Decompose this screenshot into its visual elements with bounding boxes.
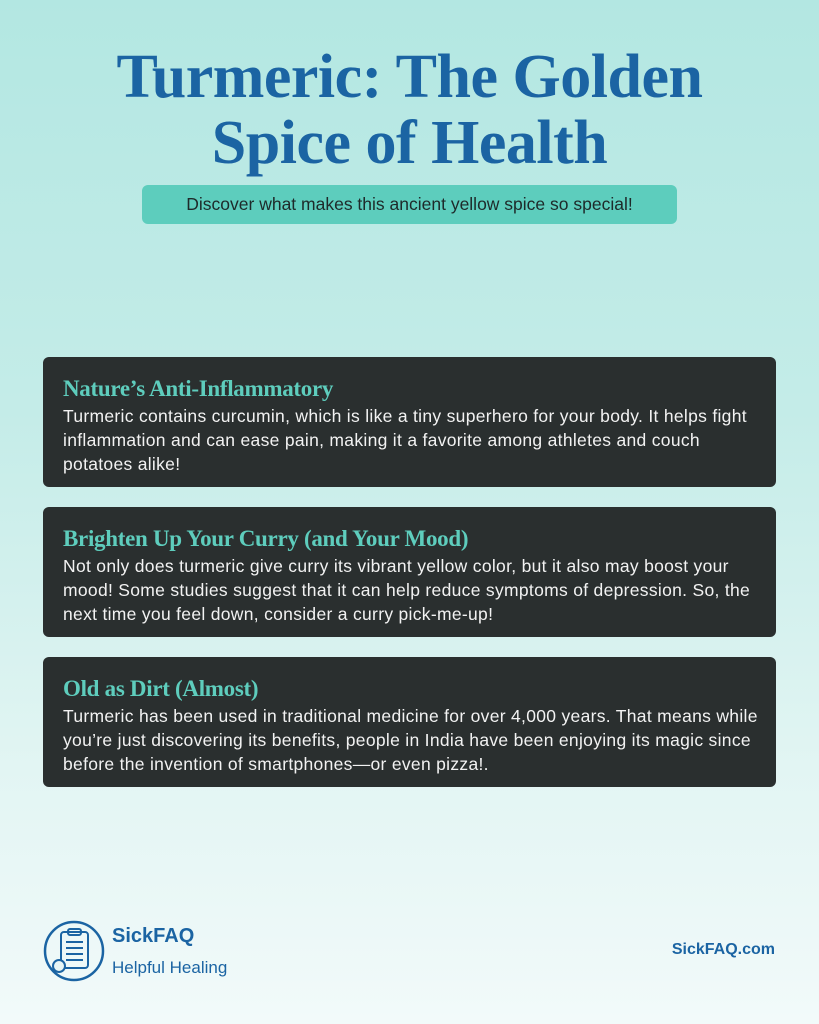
title: Spice of Health xyxy=(212,109,607,177)
text: inflammation and can ease pain, making it a favorite among athletes and couch xyxy=(63,430,700,450)
card: mood xyxy=(43,507,776,637)
website url: SickFAQ.com xyxy=(672,941,775,958)
card: anti-inflammatory xyxy=(43,357,776,487)
heading: Old as Dirt (Almost) xyxy=(63,676,258,701)
text xyxy=(63,556,750,624)
text xyxy=(63,706,758,774)
text: Turmeric contains curcumin, which is like a tiny superhero for your body. It helps fight xyxy=(63,406,747,426)
text: Turmeric has been used in traditional medicine for over 4,000 years. That means while xyxy=(63,706,758,726)
brand name: SickFAQ xyxy=(112,925,194,947)
card: history xyxy=(43,657,776,787)
subtitle pill: Discover what makes this ancient yellow spice so special! xyxy=(186,194,633,214)
text: Not only does turmeric give curry its vibrant yellow color, but it also may boost your xyxy=(63,556,729,576)
heading: Nature’s Anti-Inflammatory xyxy=(63,376,333,401)
text: mood! Some studies suggest that it can help reduce symptoms of depression. So, the xyxy=(63,580,750,600)
title xyxy=(117,43,702,177)
text: before the invention of smartphones—or even pizza!. xyxy=(63,754,489,774)
heading: Brighten Up Your Curry (and Your Mood) xyxy=(63,526,468,551)
title: Turmeric: The Golden xyxy=(117,43,702,111)
subtitle pill xyxy=(142,185,677,224)
text: you’re just discovering its benefits, people in India have been enjoying its magic since xyxy=(63,730,751,750)
text: next time you feel down, consider a curry pick-me-up! xyxy=(63,604,493,624)
text xyxy=(63,406,747,474)
text: potatoes alike! xyxy=(63,454,180,474)
icon: logo clipboard xyxy=(44,920,104,982)
tagline: Helpful Healing xyxy=(112,958,227,977)
